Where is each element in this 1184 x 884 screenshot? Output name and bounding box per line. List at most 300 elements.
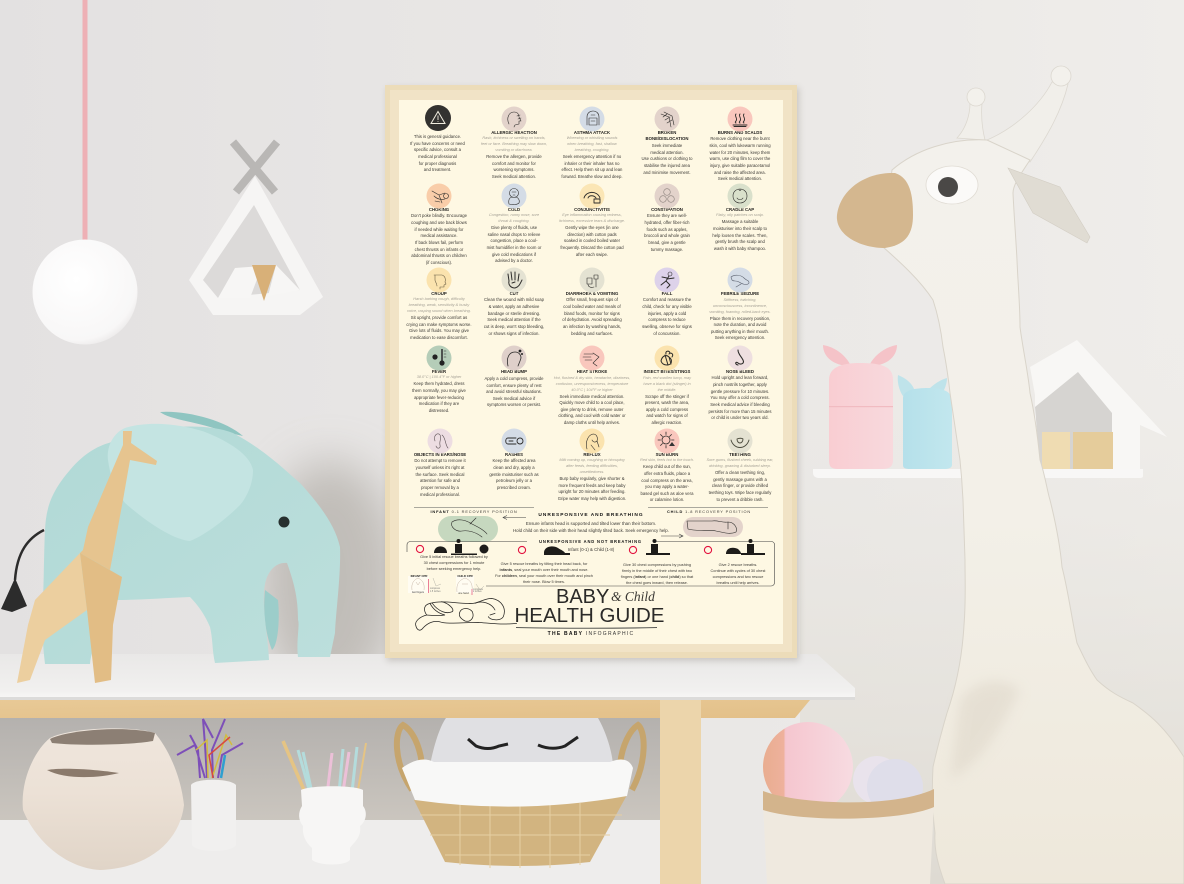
- panel: cold: [486, 184, 542, 263]
- arrow: left to infant: [503, 516, 526, 520]
- cold text: saline nasal drops to relieve: [488, 232, 540, 237]
- panel: conjunctivitis: [559, 184, 625, 257]
- icon: three circles: [654, 184, 680, 208]
- febrile seizure text: note the duration, and avoid: [714, 322, 766, 327]
- cradle cap text: help loosen the scales. Then,: [712, 233, 768, 238]
- conjunctivitis text: soaked in cooled boiled water: [564, 238, 620, 243]
- step 4 icons: breaths and compressions: [726, 539, 765, 555]
- asthma attack text: forward. Breathe slow and deep.: [561, 174, 623, 179]
- icon: child profile: [426, 268, 452, 292]
- conjunctivitis text: itchiness, excessive tears & discharge.: [559, 219, 625, 223]
- insect bites text: [628, 369, 706, 427]
- panel: heat stroke: [553, 345, 631, 427]
- nose bleed text: Hold upright and lean forward,: [712, 375, 768, 380]
- head bump text: comfort, ensure plenty of rest: [486, 383, 542, 388]
- panel: rashes: [475, 428, 553, 492]
- sun burn text: cool compress on the area,: [641, 478, 693, 483]
- febrile seizure text: vomiting, foaming, rolled-back eyes.: [709, 310, 771, 314]
- reflux text: Gripe water may help with digestion.: [558, 496, 626, 501]
- diarrhoea and vomiting text: DIARRHOEA & VOMITING: [566, 291, 618, 296]
- text: step 2: Give 5 rescue breaths by tilting their head back, for: [501, 562, 587, 566]
- choking text: Don't poke blindly. Encourage: [411, 213, 467, 218]
- cold text: Give plenty of fluids, use: [491, 225, 537, 230]
- step badges: [416, 545, 712, 554]
- text: step 4: [694, 562, 782, 586]
- text: step 3: fingers (infant) or one hand (child) so that: [621, 575, 693, 579]
- teething text: to prevent a dribble rash.: [716, 497, 764, 502]
- cold text: Congestion, runny nose, sore: [489, 213, 539, 217]
- icon: toilet and child: [580, 268, 604, 292]
- constipation text: [644, 207, 690, 252]
- icon: ear: [427, 428, 453, 454]
- insect bites text: apply a cold compress: [646, 407, 688, 412]
- choking text: (if conscious).: [426, 260, 452, 265]
- allergic reaction text: Remove the allergen, provide: [486, 154, 542, 159]
- asthma attack text: inhaler or their inhaler has no: [564, 161, 620, 166]
- constipation text: tummy massage.: [651, 247, 683, 252]
- heading: unresponsive and breathing: UNRESPONSIVE AND BREATHING: [538, 512, 644, 518]
- text: step 1: [410, 554, 498, 572]
- allergic reaction text: vomiting or diarrhoea.: [495, 148, 533, 152]
- panel: insect bites: [628, 345, 706, 427]
- text: step 1: 30 chest compressions for 1 minute: [424, 561, 484, 565]
- label: child CPR: CHILD CPR: [457, 574, 473, 578]
- broken bone text: [641, 130, 693, 175]
- poster mat: [390, 90, 792, 652]
- wall shelf with house and letter blocks: [813, 340, 1167, 478]
- conjunctivitis text: Gently wipe the eyes (in one: [565, 225, 619, 230]
- conjunctivitis text: frequently. Discard the cotton pad: [560, 245, 624, 250]
- text: step 3: [612, 562, 702, 586]
- panel: burns and scalds: [709, 106, 771, 181]
- nose bleed text: or child is under two years old.: [711, 415, 769, 420]
- label: one hand: one hand: [458, 592, 469, 595]
- label: infant compression depth: compress: [430, 588, 440, 590]
- burns and scalds text: [709, 130, 771, 181]
- rashes text: RASHES: [505, 452, 523, 457]
- croup text: breathing, weak, sensitivity & husky: [409, 303, 469, 307]
- step 2 icon: rescue breaths: [544, 546, 570, 555]
- icon: sun: [654, 428, 680, 454]
- broken bone text: medical attention.: [650, 150, 684, 155]
- panel: constipation: [644, 184, 690, 252]
- conjunctivitis text: after each swipe.: [576, 252, 608, 257]
- guidance text: This is general guidance.: [414, 134, 461, 139]
- allergic reaction text: Seek medical attention.: [492, 174, 536, 179]
- fever text: [400, 369, 478, 414]
- diarrhoea and vomiting text: cool boiled water and meals of: [563, 304, 621, 309]
- sun burn text: offer extra fluids, place a: [644, 471, 690, 476]
- CPR hand-position diagrams: [408, 576, 484, 595]
- nose bleed text: You may offer a cold compress.: [710, 395, 770, 400]
- heat stroke text: give plenty to drink, remove outer: [561, 407, 623, 412]
- icon: child with tissue: [502, 184, 526, 208]
- sun burn text: based gel such as aloe vera: [641, 491, 693, 496]
- conjunctivitis text: Eye inflammation causing redness,: [562, 213, 622, 217]
- diarrhoea and vomiting text: an infection by washing hands,: [563, 324, 621, 329]
- croup text: voice, rasping sound when breathing.: [407, 309, 471, 313]
- reflux text: REFLUX: [583, 452, 601, 457]
- text: unresponsive and breathing advice: Ensure infants head is supported and tilted lower than their bottom.: [526, 521, 656, 526]
- heat stroke text: Seek immediate medical attention.: [560, 394, 624, 399]
- wicker basket with sleeping-eyes cushion: [397, 718, 644, 868]
- heat stroke text: Quickly move child to a cool place,: [559, 400, 625, 405]
- asthma attack text: Seek emergency attention if no: [563, 154, 621, 159]
- cradle cap text: wash it with baby shampoo.: [714, 246, 766, 251]
- label: child compression depth: [473, 588, 487, 594]
- cut text: bandage or sterile dressing.: [488, 311, 540, 316]
- label: child compression depth: 2 inches: [473, 591, 482, 593]
- icon: inhaler and head: [580, 106, 604, 132]
- asthma attack text: [561, 130, 623, 179]
- reflux text: unsettledness.: [580, 470, 604, 474]
- cradle cap text: [712, 207, 768, 251]
- panel: nose bleed: [701, 344, 779, 422]
- reflux text: [553, 452, 631, 503]
- cut text: cut is deep, won't stop bleeding,: [484, 324, 544, 329]
- label: age range: Infant (0-1) & Child (1-8): [568, 547, 614, 552]
- icon: child lying down: [727, 267, 753, 293]
- constipation text: Ensure they are well-: [647, 213, 687, 218]
- panel: cut: [484, 268, 544, 336]
- diarrhoea and vomiting text: bland foods, monitor for signs: [564, 311, 620, 316]
- fever text: 38.0°C | 100.4°F or higher: [417, 375, 461, 379]
- croup text: crying can make symptoms worse.: [406, 322, 472, 327]
- text: step 4: breaths until help arrives.: [717, 581, 759, 585]
- insect bites text: present, wash the area,: [645, 400, 689, 405]
- text: step 4: compressions and two rescue: [713, 575, 763, 579]
- objects in ears text: OBJECTS IN EARS/NOSE: [414, 452, 466, 457]
- teething text: clean finger, or provide chilled: [712, 483, 768, 488]
- icon: thermometer: [426, 344, 452, 370]
- choking text: CHOKING: [429, 207, 449, 212]
- icon: eye and pad: [580, 184, 604, 208]
- sun burn text: SUN BURN: [656, 452, 678, 457]
- guidance text: and treatment.: [424, 167, 451, 172]
- constipation text: hydrated, offer fiber-rich: [644, 220, 690, 225]
- teething text: Offer a clean teething ring,: [715, 470, 765, 475]
- text: step 2: infants, seal your mouth over their mouth and nose.: [500, 568, 588, 572]
- teething text: Sore gums, flushed cheek, rubbing ear,: [707, 458, 773, 462]
- burns and scalds text: water for 20 minutes, keep them: [710, 150, 770, 155]
- panel: teething: [701, 428, 779, 503]
- choking text: chest thrusts on infants or: [415, 247, 463, 252]
- fever text: appropriate fever-reducing: [414, 395, 464, 400]
- cradle cap text: Flaky, oily patches on scalp.: [716, 213, 764, 217]
- rashes text: prescribed cream.: [497, 485, 531, 490]
- text: step 2: For children, seal your mouth over their mouth and pinch: [495, 574, 593, 578]
- broken bone text: BONE/DISLOCATION: [646, 136, 688, 141]
- panel: fall: [642, 268, 692, 336]
- infant recovery illustration: [438, 516, 498, 542]
- burns and scalds text: Seek medical attention.: [718, 176, 762, 181]
- head bump text: HEAD BUMP: [501, 369, 527, 374]
- heat stroke text: Hot, flushed & dry skin, headache, dizziness,: [554, 376, 630, 380]
- cold text: mist humidifier in the room or: [487, 245, 541, 250]
- heat stroke text: [553, 369, 631, 427]
- pencil cup: [283, 741, 366, 864]
- guidance text: for proper diagnosis: [419, 161, 456, 166]
- fever text: Keep them hydrated, dress: [413, 381, 465, 386]
- constipation text: foods such as apples,: [646, 227, 688, 232]
- panel: objects in ears or nose: [401, 428, 479, 498]
- straw vase: [177, 719, 243, 851]
- pendant lamp: [32, 0, 138, 344]
- rashes text: gentle moisturiser such as: [489, 472, 539, 477]
- baby line drawing: [416, 598, 517, 630]
- not-breathing box outline: [407, 542, 774, 586]
- teething text: [701, 452, 779, 503]
- asthma attack text: effect. Help them sit up and lean: [562, 167, 622, 172]
- icon: overheated child: [579, 345, 605, 371]
- choking text: If back blows fail, perform: [415, 240, 463, 245]
- label: infant compression depth: [430, 588, 452, 594]
- text: step 4: Continue with cycles of 30 chest: [711, 569, 765, 573]
- panel: asthma attack: [561, 106, 623, 179]
- cold text: [486, 207, 542, 263]
- brand: The Baby Infographic: THE BABY INFOGRAPHIC: [548, 631, 634, 637]
- child recovery illustration: [683, 517, 743, 537]
- teething text: teething toys. Wipe face regularly: [709, 490, 771, 495]
- objects in ears text: medical professional.: [420, 492, 460, 497]
- broken bone text: Seek immediate: [652, 143, 682, 148]
- poster sheet: [399, 100, 783, 644]
- upper white shelf and wooden edge: [0, 654, 855, 884]
- asthma attack text: when breathing, fast, shallow: [567, 142, 617, 146]
- rashes text: Keep the affected area: [493, 458, 535, 463]
- step 1 icons: breaths, compressions, phone: [434, 539, 488, 555]
- burns and scalds text: injury, give suitable paracetamol: [710, 163, 770, 168]
- cut text: CUT: [510, 291, 518, 296]
- text: step 4: Give 2 rescue breaths.: [719, 563, 757, 567]
- heat stroke text: 40.0°C | 104°F or higher: [571, 388, 613, 392]
- objects in ears text: [401, 452, 479, 498]
- broken bone text: BROKEN: [658, 130, 676, 135]
- fever text: distressed.: [429, 408, 449, 413]
- teething text: gently massage gums with a: [713, 477, 767, 482]
- choking text: coughing and use back blows: [411, 220, 467, 225]
- fall text: of concussion.: [653, 331, 681, 336]
- fall text: [628, 291, 706, 337]
- objects in ears text: the surface. Seek medical: [416, 472, 464, 477]
- sun burn text: Red skin, feels hot to the touch.: [640, 458, 694, 462]
- reflux text: Burp baby regularly, give shorter &: [559, 476, 625, 481]
- nose bleed text: persists for more than 15 minutes: [708, 409, 772, 414]
- cut text: & water, apply an adhesive: [489, 304, 539, 309]
- asthma attack text: Wheezing or whistling sounds: [567, 136, 617, 140]
- allergic reaction text: ALLERGIC REACTION: [491, 130, 537, 135]
- panel: cradle cap: [712, 184, 768, 251]
- cut text: Clean the wound with mild soap: [484, 297, 544, 302]
- title underline: [516, 626, 657, 629]
- asthma attack text: ASTHMA ATTACK: [574, 130, 610, 135]
- broken bone text: and minimise movement.: [643, 170, 691, 175]
- label: two fingers: two fingers: [412, 590, 424, 594]
- head bump text: [475, 369, 553, 409]
- cradle cap text: gently brush the scalp and: [715, 239, 765, 244]
- sun burn text: or calamine lotion.: [650, 497, 684, 502]
- broken bone text: stabilise the injured area: [644, 163, 690, 168]
- cradle cap text: Massage a suitable: [722, 219, 758, 224]
- wooden toy giraffe: [17, 431, 157, 683]
- croup text: medication to ease discomfort.: [410, 335, 468, 340]
- burns and scalds text: BURNS AND SCALDS: [718, 130, 762, 135]
- insect bites text: Scrape off the stinger if: [645, 394, 689, 399]
- text: step 3: the chest goes inward, then release.: [626, 581, 688, 585]
- triangular teepee shelf: [189, 142, 323, 315]
- burns and scalds text: Remove clothing near the burnt: [710, 136, 770, 141]
- croup text: Give lots of fluids. You may give: [409, 328, 469, 333]
- conjunctivitis text: CONJUNCTIVITIS: [574, 207, 610, 212]
- fall text: Comfort and reassure the: [643, 297, 691, 302]
- croup text: Harsh barking cough, difficulty: [413, 297, 465, 301]
- woven cotton bowl: [23, 728, 184, 870]
- burns and scalds text: and raise the affected area.: [714, 170, 766, 175]
- nose bleed text: NOSE BLEED: [726, 369, 754, 374]
- cold text: advised by a doctor.: [495, 258, 533, 263]
- text: step 2: [495, 560, 593, 585]
- burns and scalds text: warm, use cling film to cover the: [710, 156, 770, 161]
- febrile seizure text: unconsciousness, incontinence,: [713, 304, 767, 308]
- diarrhoea and vomiting text: Offer small, frequent sips of: [566, 297, 618, 302]
- rashes text: [475, 452, 553, 492]
- white plush giraffe: [837, 140, 1184, 884]
- label: infant CPR: INFANT CPR: [411, 574, 427, 578]
- objects in ears text: Do not attempt to remove it: [414, 458, 466, 463]
- icon: bee: [654, 345, 680, 371]
- soft wall shadow behind elephant: [260, 460, 400, 700]
- febrile seizure text: FEBRILE SEIZURE: [721, 291, 759, 296]
- icon: heat waves: [728, 106, 752, 132]
- icon: baby over shoulder: [579, 428, 605, 454]
- icon: baby with rash: [501, 428, 527, 454]
- heat stroke text: damp cloths until help arrives.: [564, 420, 620, 425]
- insect bites text: have a black dot (stinger) in: [643, 382, 691, 386]
- rashes text: petroleum jelly or a: [496, 478, 532, 483]
- reflux text: after feeds, feeding difficulties,: [566, 464, 618, 468]
- constipation text: broccoli and whole grain: [644, 233, 690, 238]
- allergic reaction text: worsening symptoms.: [493, 167, 535, 172]
- conjunctivitis text: [559, 207, 625, 257]
- croup text: CROUP: [431, 291, 447, 296]
- constipation text: bread, give a gentle: [648, 240, 686, 245]
- icon: face with rash: [502, 106, 526, 132]
- head bump text: and avoid stressful situations.: [486, 389, 542, 394]
- cold text: COLD: [508, 207, 520, 212]
- icon: nose: [727, 344, 753, 370]
- fever text: FEVER: [432, 369, 446, 374]
- burns and scalds text: skin, cool with lukewarm running: [709, 143, 771, 148]
- arrow: right to child: [661, 534, 683, 538]
- insect bites text: allergic reaction.: [652, 420, 682, 425]
- broken bone text: Use cushions or clothing to: [641, 156, 693, 161]
- fall text: swelling, observe for signs: [642, 324, 692, 329]
- sun burn text: you may apply a water-: [645, 484, 689, 489]
- choking text: abdominal thrusts on children: [411, 253, 467, 258]
- choking text: [411, 207, 467, 265]
- sun burn text: [628, 452, 706, 504]
- label: infant recovery position: INFANT 0-1 RECOVERY POSITION: [430, 508, 518, 514]
- croup text: Sit upright, provide comfort as: [411, 315, 467, 320]
- choking text: medical assistance.: [420, 233, 458, 238]
- icon: head with bump: [501, 345, 527, 371]
- title: & Child script: & Child: [611, 589, 655, 604]
- panel: sun burn: [628, 428, 706, 504]
- section: recovery positions and breathing drawings: [399, 500, 783, 645]
- febrile seizure text: Stiffness, twitching,: [724, 298, 756, 302]
- fever text: them normally, you may give: [412, 388, 466, 393]
- text: step 1: before seeking emergency help.: [427, 567, 481, 571]
- panel: reflux: [553, 428, 631, 503]
- icon: splinted limb: [654, 106, 680, 132]
- text: unresponsive and breathing advice: Hold child on their side with their head slightly tilted back. Seek emergency help.: [513, 528, 669, 533]
- heat stroke text: HEAT STROKE: [577, 369, 607, 374]
- panel: allergic reaction: [481, 106, 547, 179]
- cut text: or shows signs of infection.: [488, 331, 540, 336]
- allergic reaction text: feet or face. Breathing may slow down,: [481, 142, 547, 146]
- icon: baby face: [728, 184, 752, 208]
- egg basket: [763, 722, 934, 884]
- febrile seizure text: Seek emergency attention.: [715, 335, 765, 340]
- step 3 icon: compressions: [646, 539, 670, 555]
- sun burn text: Keep child out of the sun,: [643, 464, 691, 469]
- fall text: compress to reduce: [648, 317, 686, 322]
- diarrhoea and vomiting text: bedding and surfaces.: [571, 331, 613, 336]
- guidance text: If you have concerns or need: [410, 141, 465, 146]
- diarrhoea and vomiting text: [562, 291, 622, 336]
- insect bites text: and watch for signs of: [646, 413, 688, 418]
- nose bleed text: [701, 369, 779, 422]
- nose bleed text: gentle pressure for 10 minutes.: [711, 389, 769, 394]
- objects in ears text: proper removal by a: [421, 485, 459, 490]
- fall text: FALL: [662, 291, 672, 296]
- panel: croup: [406, 268, 472, 340]
- title: HEALTH GUIDE: HEALTH GUIDE: [514, 604, 664, 627]
- heat stroke text: confusion, unresponsiveness, temperature: [556, 382, 628, 386]
- rashes text: clean and dry, apply a: [493, 465, 535, 470]
- head bump text: Seek medical advice if: [493, 396, 535, 401]
- head bump text: symptoms worsen or persist.: [487, 402, 541, 407]
- insect bites text: Pain, red swollen lump, may: [643, 376, 691, 380]
- febrile seizure text: [701, 291, 779, 342]
- plush giraffe horns: [957, 66, 1071, 162]
- panel: choking: [411, 184, 467, 265]
- allergic reaction text: Rash, itchiness or swelling on hands,: [482, 136, 546, 140]
- cut text: Seek medical attention if the: [487, 317, 541, 322]
- heading: unresponsive and not breathing: UNRESPONSIVE AND NOT BREATHING: [539, 539, 642, 544]
- panel: head bump: [475, 345, 553, 409]
- wooden poster frame: [385, 85, 797, 658]
- croup text: [406, 291, 472, 340]
- text: step 2: their nose. Blow 5 times.: [523, 580, 565, 584]
- febrile seizure text: putting anything in their mouth.: [711, 329, 769, 334]
- teal toy elephant: [42, 412, 340, 664]
- toy elephant tail: [1, 530, 44, 612]
- objects in ears text: yourself unless it's right at: [416, 465, 464, 470]
- title: BABY: BABY: [556, 586, 609, 608]
- icon: hand: [502, 268, 526, 292]
- nose bleed text: pinch nostrils together, apply: [713, 382, 767, 387]
- icon: back blows on infant: [426, 184, 452, 208]
- cold text: congestion, place a cool-: [490, 238, 538, 243]
- label: infant compression depth: 1.5 inches: [430, 591, 440, 593]
- label: child compression depth: compress: [473, 588, 483, 590]
- insect bites text: the middle.: [658, 388, 676, 392]
- guidance text: medical professional: [418, 154, 457, 159]
- reflux text: Milk coming up, coughing or hiccuping: [559, 458, 625, 462]
- head bump text: Apply a cold compress, provide: [484, 376, 544, 381]
- icon: falling child: [654, 266, 680, 292]
